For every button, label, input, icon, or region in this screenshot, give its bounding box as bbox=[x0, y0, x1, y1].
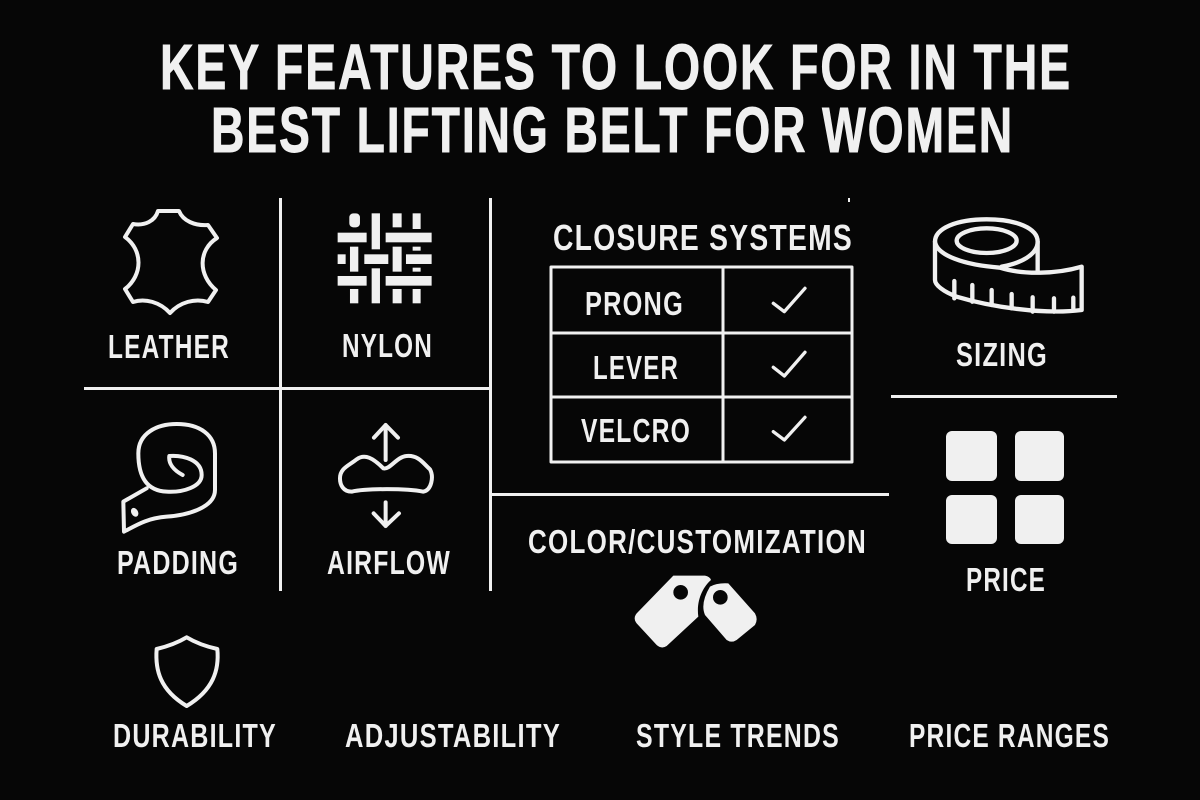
icon: measuring tape bbox=[935, 219, 1082, 312]
label: airflow: AIRFLOW bbox=[327, 544, 451, 581]
label: padding: PADDING bbox=[117, 544, 239, 581]
panel: price bbox=[946, 431, 1064, 598]
table: closure options bbox=[551, 267, 852, 462]
label: nylon: NYLON bbox=[342, 327, 433, 364]
label: price ranges: PRICE RANGES bbox=[909, 717, 1110, 754]
table: closure options: PRONG bbox=[585, 285, 684, 322]
panel: sizing bbox=[935, 219, 1082, 373]
icon: two tags bbox=[635, 576, 757, 647]
label: style trends: STYLE TRENDS bbox=[636, 717, 840, 754]
panel: leather bbox=[108, 211, 230, 365]
panel: color and customization bbox=[528, 523, 867, 647]
label: price: PRICE bbox=[966, 561, 1046, 598]
title bbox=[160, 31, 1072, 166]
label: durability: DURABILITY bbox=[113, 717, 277, 754]
icon: padding roll bbox=[123, 424, 215, 532]
label: sizing: SIZING bbox=[956, 336, 1048, 373]
panel: durability bbox=[113, 637, 277, 754]
icon: airflow cushion with arrows bbox=[340, 425, 432, 526]
icon: woven nylon bbox=[338, 213, 432, 303]
icon: shield bbox=[156, 637, 218, 706]
icon: four squares bbox=[946, 431, 1064, 544]
label: color/customization: COLOR/CUSTOMIZATION bbox=[528, 523, 867, 560]
table: closure options: LEVER bbox=[593, 349, 679, 386]
panel: airflow bbox=[327, 425, 451, 581]
heading: closure systems: CLOSURE SYSTEMS bbox=[553, 217, 853, 258]
icon: leather hide bbox=[125, 211, 217, 313]
label: adjustability: ADJUSTABILITY bbox=[345, 717, 561, 754]
panel: closure systems bbox=[551, 217, 853, 462]
table: closure options: VELCRO bbox=[581, 412, 691, 449]
panel: padding bbox=[117, 424, 239, 581]
panel: nylon bbox=[338, 213, 433, 364]
label: leather: LEATHER bbox=[108, 328, 230, 365]
